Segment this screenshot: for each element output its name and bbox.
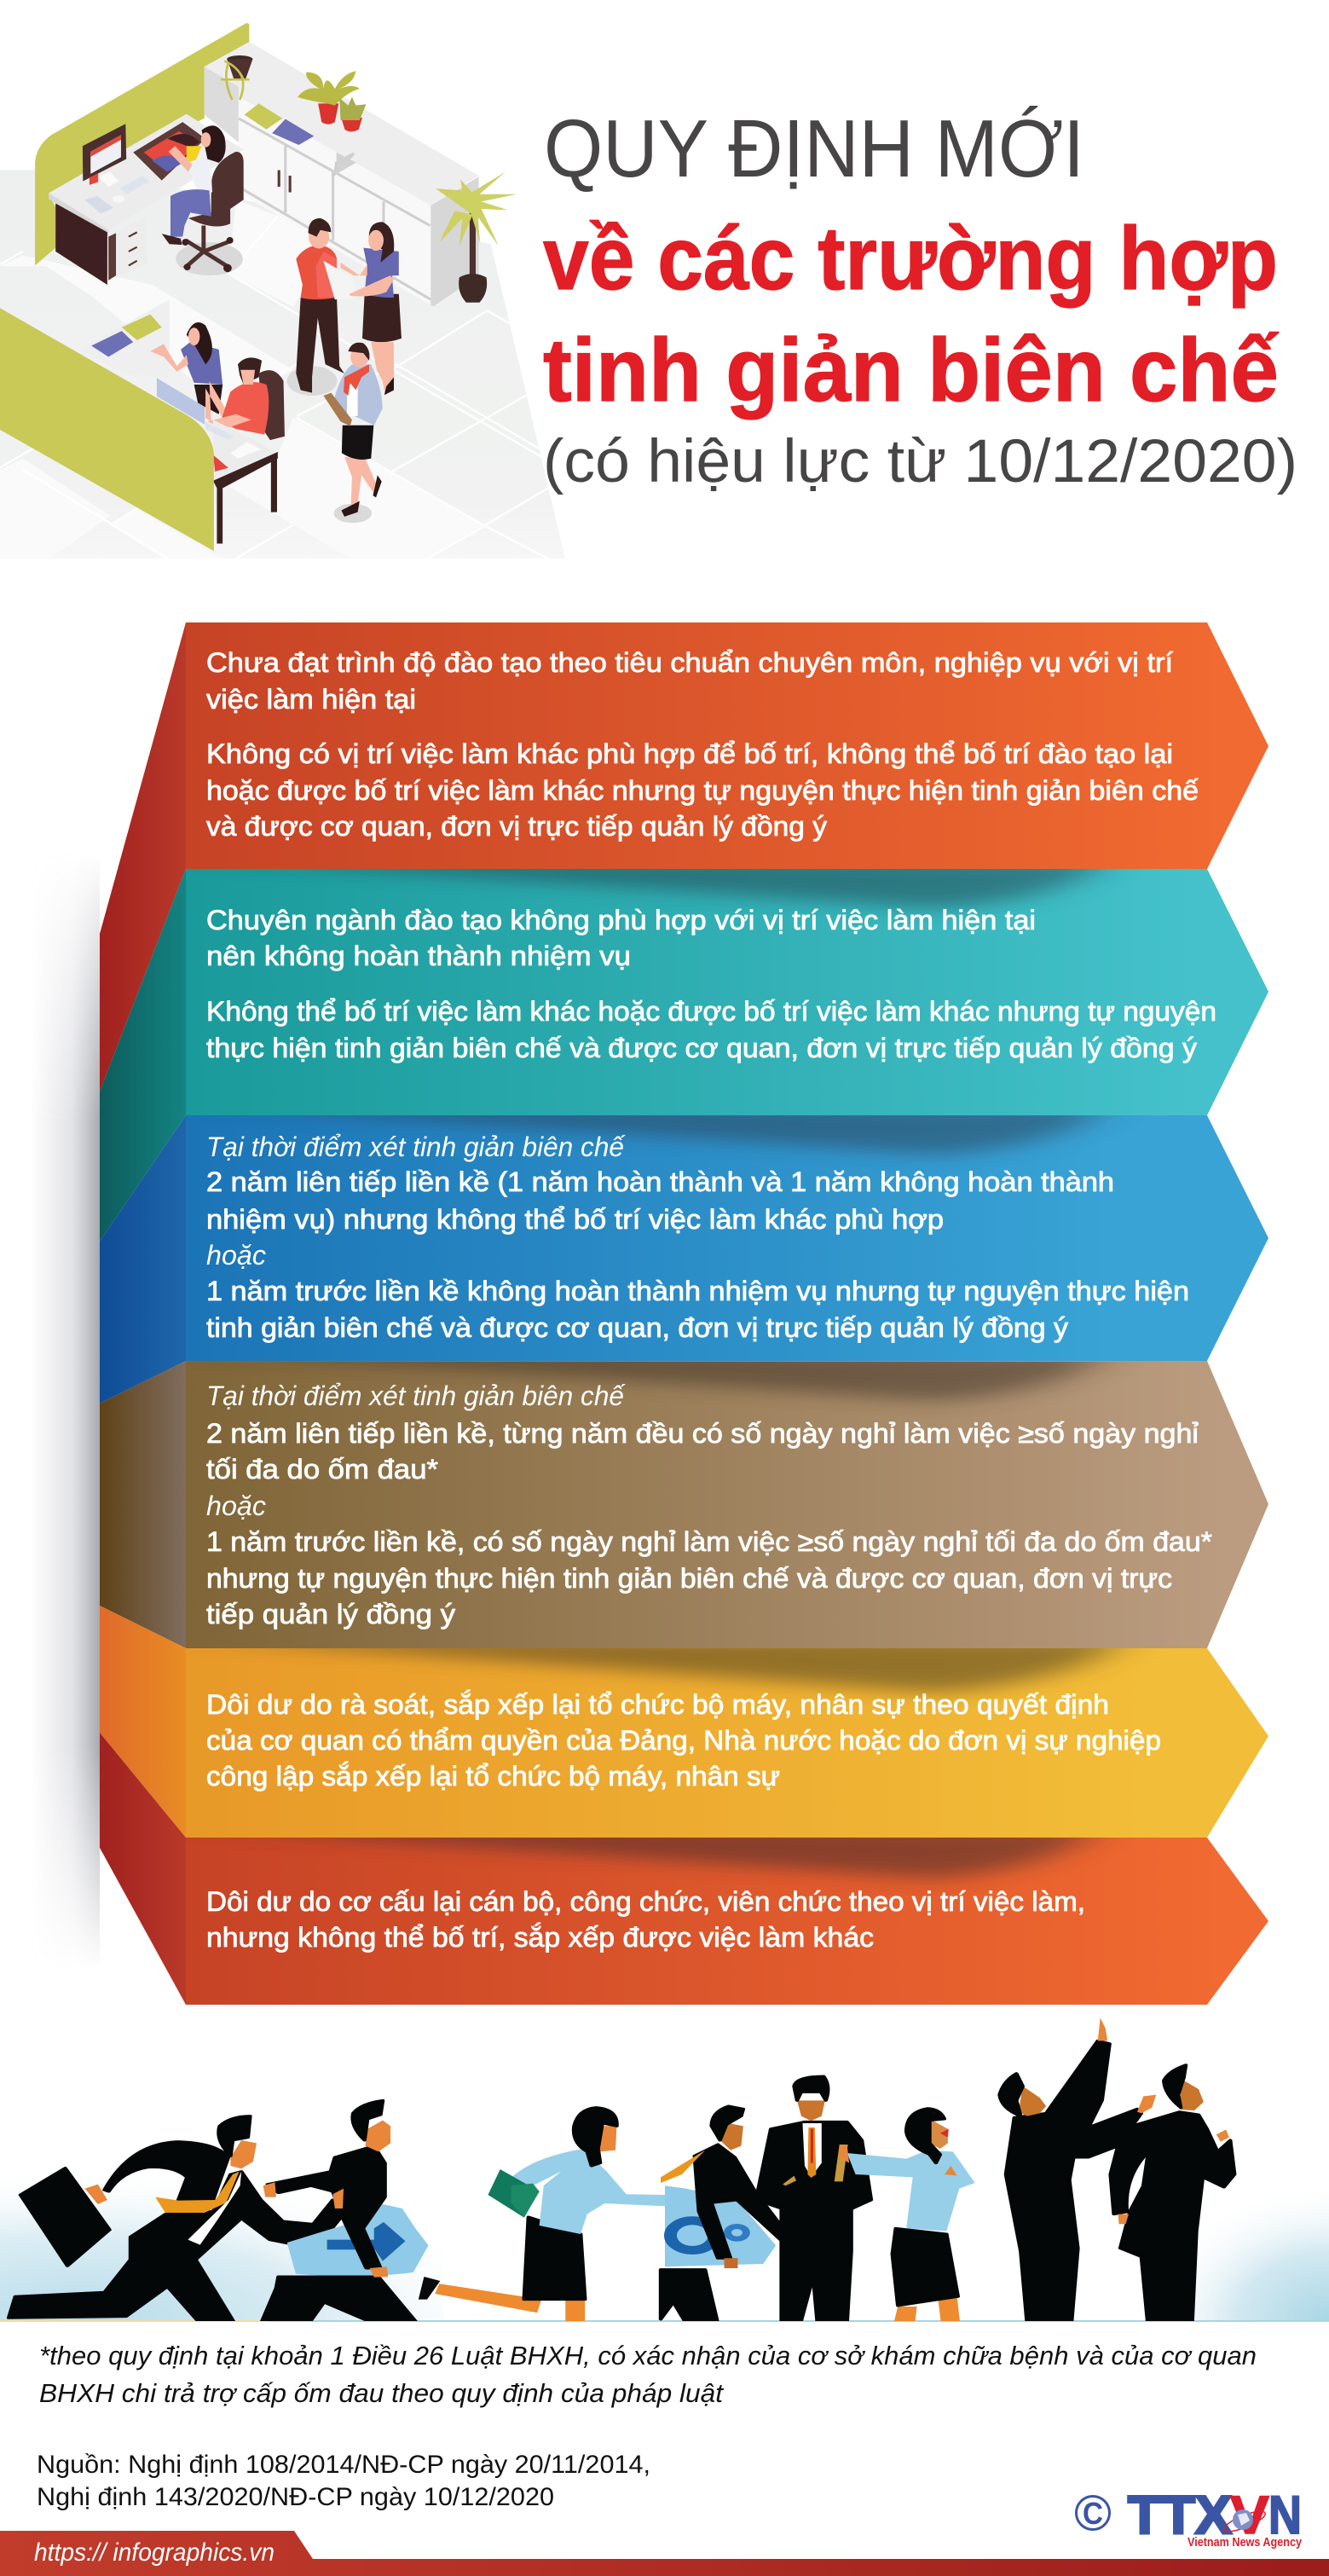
- computer monitor: [83, 124, 149, 214]
- source: Nghị định 143/2020/NĐ-CP ngày 10/12/2020: [37, 2483, 554, 2511]
- title line 3: tinh giản biên chế: [543, 321, 1280, 420]
- panel 2 text: Chuyên ngành đào tạo không phù hợp với vị trí việc làm hiện tại: [206, 905, 1036, 935]
- logo: TTXVN: [1076, 2486, 1302, 2550]
- globe emblem: [1222, 2508, 1268, 2535]
- man carrying gear bag: [661, 2106, 795, 2324]
- panel 3 text: 1 năm trước liền kề không hoàn thành nhiệm vụ nhưng tự nguyện thực hiện: [206, 1276, 1189, 1306]
- palm plant: [428, 172, 517, 303]
- panel 4 text: hoặc: [206, 1491, 266, 1521]
- panel 4 text: [206, 1381, 1212, 1630]
- logo: TTXVN: N: [1268, 2486, 1302, 2545]
- man pointing upward: [999, 2018, 1156, 2324]
- panel 2: teal: [100, 859, 1268, 1242]
- footnote: *theo quy định tại khoản 1 Điều 26 Luật BHXH, có xác nhận của cơ sở khám chữa bệnh và của cơ quan: [39, 2341, 1257, 2370]
- panel 3 text: 2 năm liên tiếp liền kề (1 năm hoàn thành và 1 năm không hoàn thành: [206, 1166, 1114, 1197]
- panel 2 text: nên không hoàn thành nhiệm vụ: [206, 941, 631, 971]
- woman in blue: [840, 2109, 975, 2324]
- panel 1 text: việc làm hiện tại: [206, 684, 416, 715]
- panel 3 text: tinh giản biên chế và được cơ quan, đơn vị trực tiếp quản lý đồng ý: [206, 1312, 1068, 1343]
- illustration: workers running and pointing: [9, 2018, 1234, 2324]
- spine drop shadow: [42, 878, 100, 1948]
- title line 4: effective date: (có hiệu lực từ 10/12/2020): [543, 428, 1297, 495]
- walking woman with clipboard: [323, 343, 383, 523]
- panel 6: red-orange: [100, 1733, 1268, 2005]
- panel 2 text: Không thể bố trí việc làm khác hoặc được bố trí việc làm khác nhưng tự nguyện: [206, 996, 1216, 1027]
- footnote: [39, 2341, 1257, 2408]
- panel 2 text: [206, 905, 1216, 1063]
- seated woman with chair: [162, 125, 244, 275]
- back green partition: [35, 23, 249, 265]
- panel 4 text: 2 năm liên tiếp liền kề, từng năm đều có số ngày nghỉ làm việc ≥số ngày nghỉ: [206, 1418, 1199, 1449]
- panel 3: blue: [100, 1105, 1268, 1404]
- workers, left part: [9, 2100, 666, 2324]
- front green partition: [0, 308, 214, 551]
- panel 6 text: Dôi dư do cơ cấu lại cán bộ, công chức, viên chức theo vị trí việc làm,: [206, 1886, 1085, 1917]
- title line 2: về các trường hợp: [543, 209, 1278, 309]
- website link: https:// infographics.vn: [34, 2538, 274, 2567]
- seated man in red at desk: [207, 357, 285, 440]
- office floor: [0, 171, 565, 559]
- lower desk: [205, 420, 278, 544]
- title line 1: QUY ĐỊNH MỚI: [544, 103, 1084, 194]
- runner with cloud bag: [261, 2100, 429, 2324]
- illustration background: [0, 2166, 1329, 2322]
- panel 6 text: nhưng không thể bố trí, sắp xếp được việc làm khác: [206, 1922, 874, 1953]
- panel 4 text: tiếp quản lý đồng ý: [206, 1599, 455, 1630]
- title: [543, 103, 1297, 495]
- panel 3 text: hoặc: [206, 1240, 266, 1271]
- panel 4 text: nhưng tự nguyện thực hiện tinh giản biên chế và được cơ quan, đơn vị trực: [206, 1563, 1172, 1594]
- laptop: [157, 378, 205, 425]
- central man in suit: [756, 2076, 871, 2324]
- panel 5 text: của cơ quan có thẩm quyền của Đảng, Nhà nước hoặc do đơn vị sự nghiệp: [206, 1725, 1161, 1756]
- panel 5 text: Dôi dư do rà soát, sắp xếp lại tổ chức bộ máy, nhân sự theo quyết định: [206, 1689, 1109, 1720]
- logo: TTXVN: V: [1230, 2486, 1269, 2545]
- panel 1 text: Chưa đạt trình độ đào tạo theo tiêu chuẩn chuyên môn, nghiệp vụ với vị trí: [206, 647, 1173, 678]
- desk: [49, 114, 244, 285]
- panel 4: brown: [100, 1352, 1268, 1648]
- panel 1 text: và được cơ quan, đơn vị trực tiếp quản lý đồng ý: [206, 811, 827, 842]
- plants on cabinet: [221, 55, 366, 131]
- source: Nguồn: Nghị định 108/2014/NĐ-CP ngày 20/11/2014,: [37, 2451, 650, 2479]
- runner with briefcase: [9, 2116, 344, 2324]
- panel 3 text: nhiệm vụ) nhưng không thể bố trí việc làm khác phù hợp: [206, 1204, 944, 1235]
- panel 3 text: Tại thời điểm xét tinh giản biên chế: [206, 1132, 626, 1162]
- woman behind laptop: [150, 322, 227, 421]
- panel 3 text: [206, 1132, 1189, 1343]
- panel 1: orange: [100, 622, 1268, 1091]
- logo: TTXVN: Vietnam News Agency: [1187, 2536, 1302, 2550]
- panel 6 text: [206, 1886, 1085, 1953]
- footnote: BHXH chi trả trợ cấp ốm đau theo quy định của pháp luật: [39, 2378, 724, 2408]
- panel 1 text: Không có vị trí việc làm khác phù hợp để bố trí, không thể bố trí đào tạo lại: [206, 738, 1173, 769]
- panel 1 text: [206, 647, 1199, 842]
- panel 2 text: thực hiện tinh giản biên chế và được cơ quan, đơn vị trực tiếp quản lý đồng ý: [206, 1033, 1197, 1063]
- drawing tablet: [133, 122, 205, 181]
- panel 5: yellow: [100, 1606, 1268, 1838]
- footer bar: [0, 2531, 1329, 2576]
- panel 4 text: tối đa do ốm đau*: [206, 1454, 438, 1485]
- workers, right part: [661, 2018, 1234, 2324]
- cabinet wall: [205, 42, 479, 306]
- man raising fist: [1111, 2065, 1234, 2324]
- source: [37, 2451, 650, 2511]
- illustration: isometric office: [0, 23, 565, 559]
- lower cubicle shelf: [80, 299, 170, 379]
- panel 5 text: [206, 1689, 1161, 1792]
- standing woman in purple: [323, 222, 402, 395]
- panel 5 text: công lập sắp xếp lại tổ chức bộ máy, nhân sự: [206, 1761, 780, 1792]
- running woman: [419, 2108, 666, 2324]
- logo: TTXVN: TTX: [1128, 2486, 1232, 2545]
- copyright mark: C: [1083, 2496, 1103, 2531]
- panel 4 text: Tại thời điểm xét tinh giản biên chế: [206, 1381, 626, 1411]
- standing man in red: [287, 218, 344, 396]
- copyright mark: [1076, 2496, 1110, 2531]
- panel 4 text: 1 năm trước liền kề, có số ngày nghỉ làm việc ≥số ngày nghỉ tối đa do ốm đau*: [206, 1526, 1212, 1557]
- panel 1 text: hoặc được bố trí việc làm khác nhưng tự nguyện thực hiện tinh giản biên chế: [206, 775, 1199, 806]
